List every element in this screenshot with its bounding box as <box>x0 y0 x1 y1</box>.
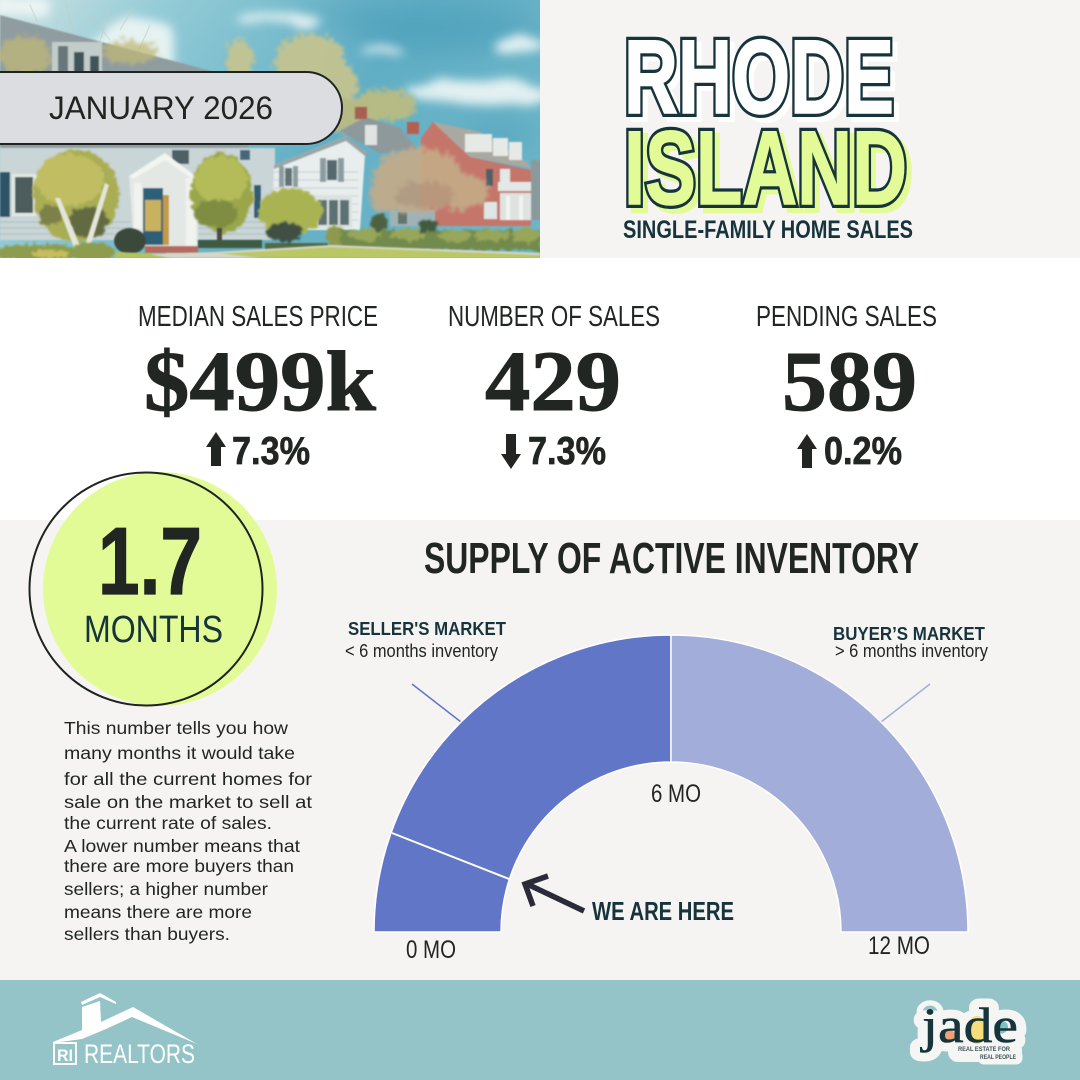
months badge <box>30 472 277 706</box>
brick house <box>421 122 531 226</box>
gauge label 6 MO: 6 MO <box>651 780 701 808</box>
explanation text: there are more buyers than <box>64 856 294 876</box>
label: seller's market: SELLER'S MARKET <box>348 619 506 639</box>
left yellow tree <box>33 150 119 242</box>
sticker background: jade <box>920 997 1018 1053</box>
stat: median sales price: $499k <box>144 333 376 429</box>
label: buyer's market: BUYER’S MARKET <box>833 624 985 644</box>
left roof <box>0 15 250 150</box>
explanation text: A lower number means that <box>64 836 300 856</box>
ISLAND lime shadow fill: ISLAND <box>629 115 912 232</box>
explanation text: many months it would take <box>64 743 295 763</box>
current-value marker <box>392 833 509 879</box>
label: buyer's market <box>833 624 988 661</box>
side house window strip <box>390 210 435 226</box>
gauge label 0 MO: 0 MO <box>406 936 456 964</box>
flower bed <box>0 242 114 262</box>
explanation text: sellers than buyers. <box>64 924 230 944</box>
footer band <box>0 980 1080 1080</box>
buyer segment <box>671 635 968 932</box>
stat: pending sales: 0.2% <box>824 430 902 473</box>
stat: median sales price <box>138 301 378 473</box>
explanation text: for all the current homes for <box>64 769 312 789</box>
stat: pending sales: 589 <box>782 333 917 429</box>
ISLAND inner fill: ISLAND <box>624 110 907 227</box>
mid house wall <box>272 136 365 230</box>
RHODE inner fill: RHODE <box>624 19 894 136</box>
round bush <box>191 153 253 233</box>
explanation text: sellers; a higher number <box>64 879 268 899</box>
explanation text: the current rate of sales. <box>64 813 272 833</box>
logo: jade <box>920 997 1022 1064</box>
explanation text: sale on the market to sell at <box>64 792 312 812</box>
leader line: buyer <box>881 684 930 722</box>
big number: 1.7 <box>98 508 202 615</box>
explanation text: This number tells you how <box>64 718 288 738</box>
logo: jade: jade <box>920 997 1018 1053</box>
title: Rhode Island <box>624 19 912 232</box>
arrow: we are here <box>525 876 584 911</box>
pink tree <box>368 148 488 212</box>
front bush <box>258 189 344 246</box>
lawn and paths <box>114 251 169 258</box>
stat: pending sales: PENDING SALES <box>756 301 937 333</box>
bare branches, upper left <box>30 0 150 50</box>
gauge label 12 MO: 12 MO <box>868 932 930 960</box>
hedges <box>340 215 540 250</box>
logo: jade: REAL PEOPLE <box>980 1055 1016 1061</box>
explanation text <box>64 718 312 944</box>
photo: suburban houses <box>0 0 550 262</box>
explanation text: means there are more <box>64 902 252 922</box>
stat: number of sales: 7.3% <box>528 430 606 473</box>
clouds <box>0 0 550 106</box>
stat: median sales price: MEDIAN SALES PRICE <box>138 301 378 333</box>
label: buyer's market: > 6 months inventory <box>835 641 988 661</box>
gauge chart <box>374 635 968 932</box>
stat: number of sales <box>448 301 660 473</box>
left house wall <box>0 148 275 240</box>
subtitle: SINGLE-FAMILY HOME SALES <box>623 216 913 244</box>
RHODE white shadow fill: RHODE <box>629 24 899 141</box>
mid house roof <box>340 117 418 153</box>
logo: RI Realtors: RI <box>57 1046 73 1065</box>
dark shrub <box>114 228 146 254</box>
leader line: seller <box>412 684 461 722</box>
stat: pending sales <box>756 301 937 473</box>
months label: MONTHS <box>84 609 223 651</box>
stat: number of sales: 429 <box>485 333 621 429</box>
stat: number of sales: NUMBER OF SALES <box>448 301 660 333</box>
we are here label: WE ARE HERE <box>592 896 734 926</box>
logo: RI Realtors: REALTORS <box>84 1039 195 1069</box>
seller segment <box>374 635 671 932</box>
portico <box>129 153 198 246</box>
logo: RI Realtors <box>53 993 197 1069</box>
RHODE outline: RHODE <box>624 19 894 136</box>
label: seller's market: < 6 months inventory <box>345 641 498 661</box>
date pill <box>0 72 342 144</box>
upper tree canopy <box>226 34 417 133</box>
date text: JANUARY 2026 <box>49 90 273 126</box>
label: seller's market <box>345 619 506 661</box>
stat: median sales price: 7.3% <box>232 430 310 473</box>
white statistics band <box>0 258 1080 520</box>
ISLAND outline: ISLAND <box>624 110 907 227</box>
logo: jade: REAL ESTATE FOR <box>958 1047 1011 1053</box>
